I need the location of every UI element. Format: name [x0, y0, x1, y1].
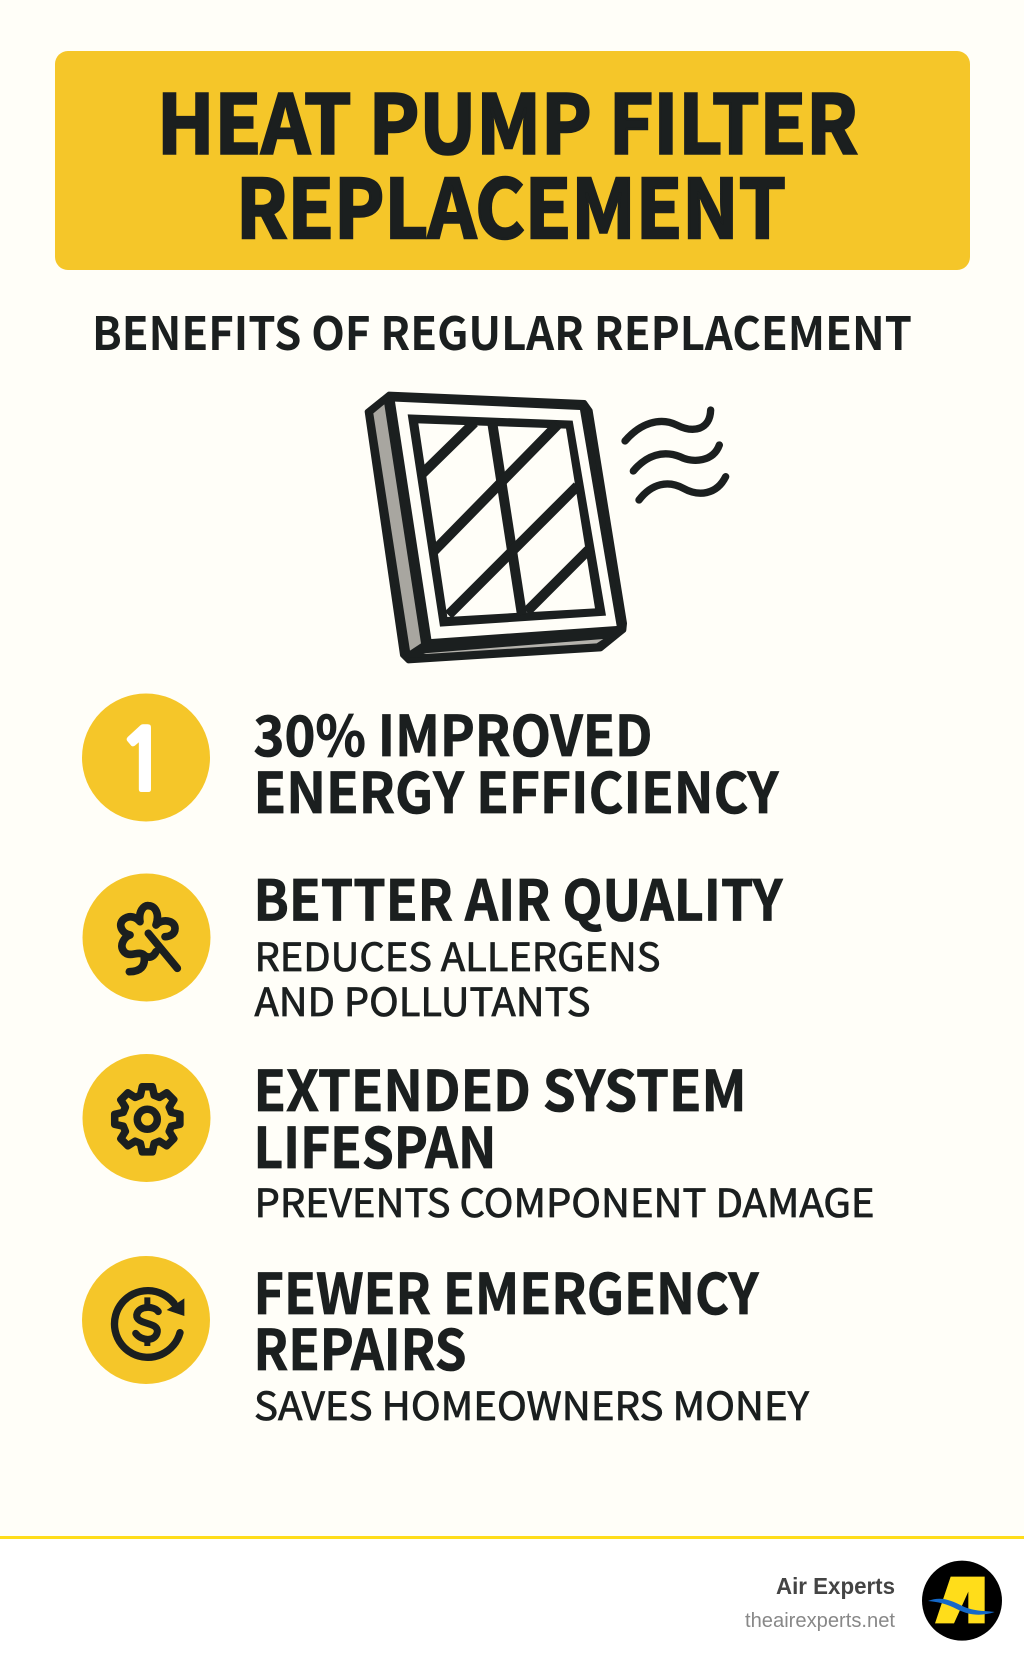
- icon: number 1 badge: 1: [117, 719, 169, 803]
- benefit 3 text: LIFESPAN: [254, 1104, 496, 1185]
- title: REPLACEMENT: [236, 145, 786, 262]
- benefit 2: air quality: [82, 856, 783, 1028]
- benefit 4 text: SAVES HOMEOWNERS MONEY: [254, 1376, 809, 1432]
- benefit 1 heading: ENERGY EFFICIENCY: [254, 749, 779, 830]
- benefit 4: emergency repairs: [82, 1250, 809, 1432]
- title banner: [55, 51, 970, 270]
- benefit 4 text: FEWER EMERGENCY: [254, 1250, 759, 1331]
- benefit 3 text: PREVENTS COMPONENT DAMAGE: [254, 1173, 874, 1229]
- title: [157, 60, 858, 262]
- title: HEAT PUMP FILTER: [157, 60, 858, 178]
- benefit 1: energy efficiency: [82, 692, 779, 830]
- benefit 2 text: BETTER AIR QUALITY: [254, 856, 783, 938]
- benefit 2 text: AND POLLUTANTS: [254, 972, 590, 1028]
- icon: air experts logo: [922, 1561, 1002, 1641]
- brand url: theairexperts.net: [745, 1609, 895, 1632]
- icon: dollar cycle badge: [82, 1256, 210, 1384]
- benefit 2 text: REDUCES ALLERGENS: [254, 927, 660, 983]
- footer: [0, 1536, 1024, 1666]
- benefit 3 text: EXTENDED SYSTEM: [254, 1047, 746, 1128]
- benefit 4 text: REPAIRS: [254, 1306, 466, 1387]
- subtitle: BENEFITS OF REGULAR REPLACEMENT: [92, 298, 912, 364]
- icon: number 1 badge: [82, 694, 210, 822]
- brand name: Air Experts: [776, 1573, 895, 1599]
- benefit 3 text: [254, 1047, 874, 1229]
- icon: gear badge: [82, 1054, 210, 1182]
- benefit 1 heading: 30% IMPROVED: [254, 692, 652, 773]
- icon: airflow waves: [625, 410, 726, 500]
- benefit 2 text: [254, 856, 783, 1028]
- benefit 1 heading: [254, 692, 779, 830]
- benefit 3: system lifespan: [82, 1047, 874, 1229]
- icon: leaf allergen badge: [82, 874, 210, 1002]
- icon: air filter with airflow: [367, 394, 726, 661]
- benefit 4 text: [254, 1250, 809, 1432]
